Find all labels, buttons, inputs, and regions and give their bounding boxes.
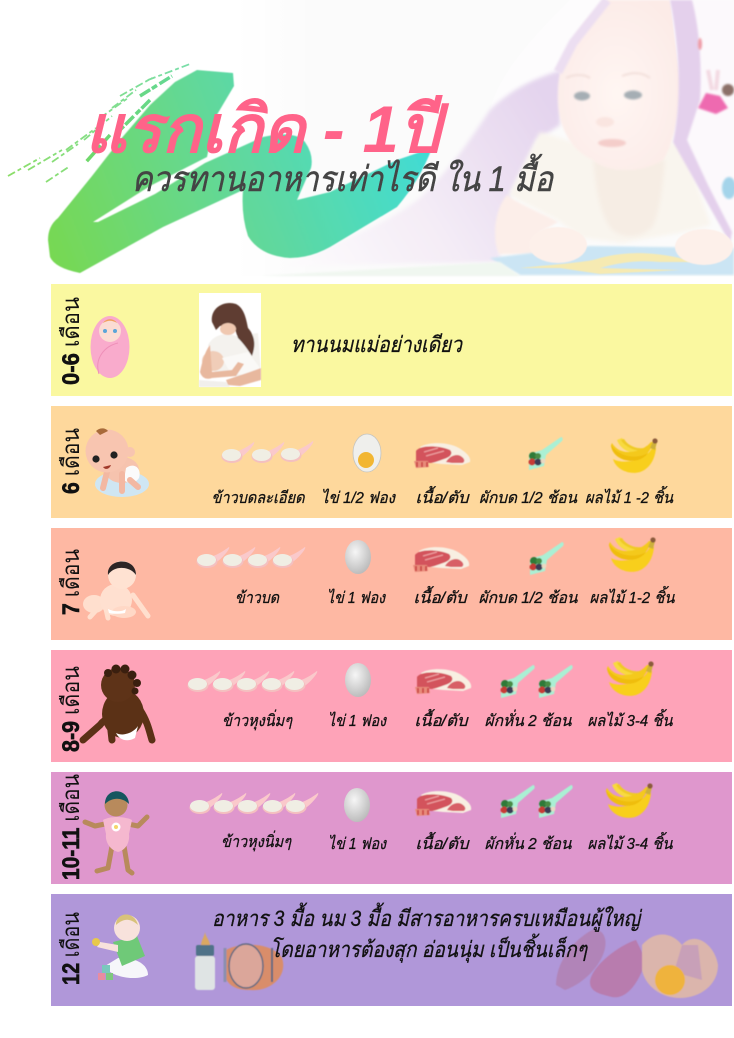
face xyxy=(558,0,680,170)
photo: mother breastfeeding xyxy=(199,293,261,387)
food labels: ไข่ 1 ฟอง xyxy=(328,834,387,853)
hair xyxy=(212,303,254,356)
icon: bananas xyxy=(606,783,653,818)
food labels xyxy=(221,830,673,853)
food labels: ผลไม้ 3-4 ชิ้น xyxy=(588,832,673,853)
hands xyxy=(529,227,587,263)
icon: bananas xyxy=(609,537,656,572)
food labels: เนื้อ/ตับ xyxy=(416,486,470,507)
food labels: ผลไม้ 1 -2 ชิ้น xyxy=(585,486,674,507)
shirt xyxy=(509,132,711,243)
title: แรกเกิด - 1ปี xyxy=(85,92,450,166)
face xyxy=(220,323,236,335)
age label: 7 เดือน xyxy=(58,549,85,615)
arm xyxy=(495,195,558,254)
age label: 8-9 เดือน xyxy=(58,666,85,752)
icon: standing toddler xyxy=(85,791,147,873)
food labels: ไข่ 1 ฟอง xyxy=(327,588,386,607)
food labels: ผักหั่น 2 ช้อน xyxy=(484,832,573,853)
blanket lilac edge xyxy=(670,0,732,243)
blanket right side xyxy=(670,0,734,240)
food labels: ผลไม้ 3-4 ชิ้น xyxy=(588,709,673,730)
facial features xyxy=(566,73,650,147)
food labels: ผักหั่น 2 ช้อน xyxy=(484,709,573,730)
icon: swaddled baby xyxy=(90,316,130,378)
icon: plate and cutlery xyxy=(224,944,283,990)
icon: bananas xyxy=(607,661,654,696)
age label: 6 เดือน xyxy=(58,428,85,494)
icon: vegetable spoons xyxy=(500,785,573,818)
food labels: ข้าวบดละเอียด xyxy=(212,489,306,507)
panel: 10-11 months xyxy=(51,772,732,884)
blanket white upper part xyxy=(490,0,607,110)
icon: rice spoons xyxy=(188,671,317,692)
text line 1: อาหาร 3 มื้อ นม 3 มื้อ มีสารอาหารครบเหมือนผู้ใหญ่ xyxy=(212,902,643,932)
baby head xyxy=(202,351,224,371)
food labels: ไข่ 1/2 ฟอง xyxy=(321,488,396,507)
chest xyxy=(593,160,665,236)
brush stroke xyxy=(8,64,432,273)
blanket lilac edge top left xyxy=(558,0,607,72)
photo: baby under blanket xyxy=(260,0,734,276)
icon: sitting baby xyxy=(83,561,148,618)
food labels: เนื้อ/ตับ xyxy=(416,832,470,853)
food labels: ผลไม้ 1-2 ชิ้น xyxy=(590,586,675,607)
subtitle: ควรทานอาหารเท่าไรดี ใน 1 มื้อ xyxy=(132,153,555,199)
food labels: ข้าวหุงนิ่มๆ xyxy=(221,830,292,852)
food labels: ผักบด 1/2 ช้อน xyxy=(478,589,579,607)
food labels: ข้าวบด xyxy=(235,589,280,607)
icon: dark-skinned baby xyxy=(83,664,152,740)
icon: rice spoons xyxy=(190,793,318,814)
icon: bananas xyxy=(611,438,658,473)
panel: 6 months xyxy=(51,406,732,518)
play mat xyxy=(490,246,734,275)
food labels: ข้าวหุงนิ่มๆ xyxy=(222,709,293,731)
text: ทานนมแม่อย่างเดียว xyxy=(291,332,463,357)
food labels: ไข่ 1 ฟอง xyxy=(328,711,387,730)
food labels xyxy=(222,709,673,731)
food labels: เนื้อ/ตับ xyxy=(414,586,468,607)
blanket lilac lower part xyxy=(285,70,562,266)
icon: vegetable spoon xyxy=(528,437,563,470)
age label: 10-11 เดือน xyxy=(58,774,85,880)
baby body xyxy=(222,352,260,378)
blanket print xyxy=(698,38,734,199)
food labels xyxy=(212,486,674,507)
icon: vegetable spoons xyxy=(500,665,573,698)
panel: 7 months xyxy=(51,528,732,640)
icon: vegetable spoon xyxy=(530,542,564,575)
icon: meat xyxy=(414,443,470,468)
icon: meat xyxy=(415,791,471,816)
icon: baby bottle xyxy=(195,932,215,990)
food labels: ผักบด 1/2 ช้อน xyxy=(479,489,578,507)
panel: 12 months xyxy=(51,894,732,1006)
icon: meat xyxy=(413,547,469,572)
icon: cracked egg xyxy=(642,934,718,998)
panel: 0-6 months xyxy=(51,284,732,396)
icon: egg xyxy=(345,540,371,574)
food labels xyxy=(235,586,675,607)
header background xyxy=(0,0,734,280)
text line 2: โดยอาหารต้องสุก อ่อนนุ่ม เป็นชิ้นเล็กๆ xyxy=(270,933,588,963)
arms xyxy=(200,345,244,379)
icon: baby with blocks xyxy=(92,914,148,980)
food labels: เนื้อ/ตับ xyxy=(414,709,469,730)
icon: rice spoons xyxy=(196,547,305,568)
icon: egg xyxy=(345,663,371,697)
age label: 12 เดือน xyxy=(58,912,85,985)
icon: egg xyxy=(344,788,370,822)
panel: 8-9 months xyxy=(51,650,732,762)
icon: raw meat faded xyxy=(556,930,646,997)
shirt xyxy=(208,333,261,380)
age label: 0-6 เดือน xyxy=(58,297,85,385)
icon: boiled egg xyxy=(353,434,381,472)
icon: meat xyxy=(415,669,471,694)
icon: rice spoons xyxy=(222,441,313,463)
icon: crawling baby xyxy=(86,428,149,497)
